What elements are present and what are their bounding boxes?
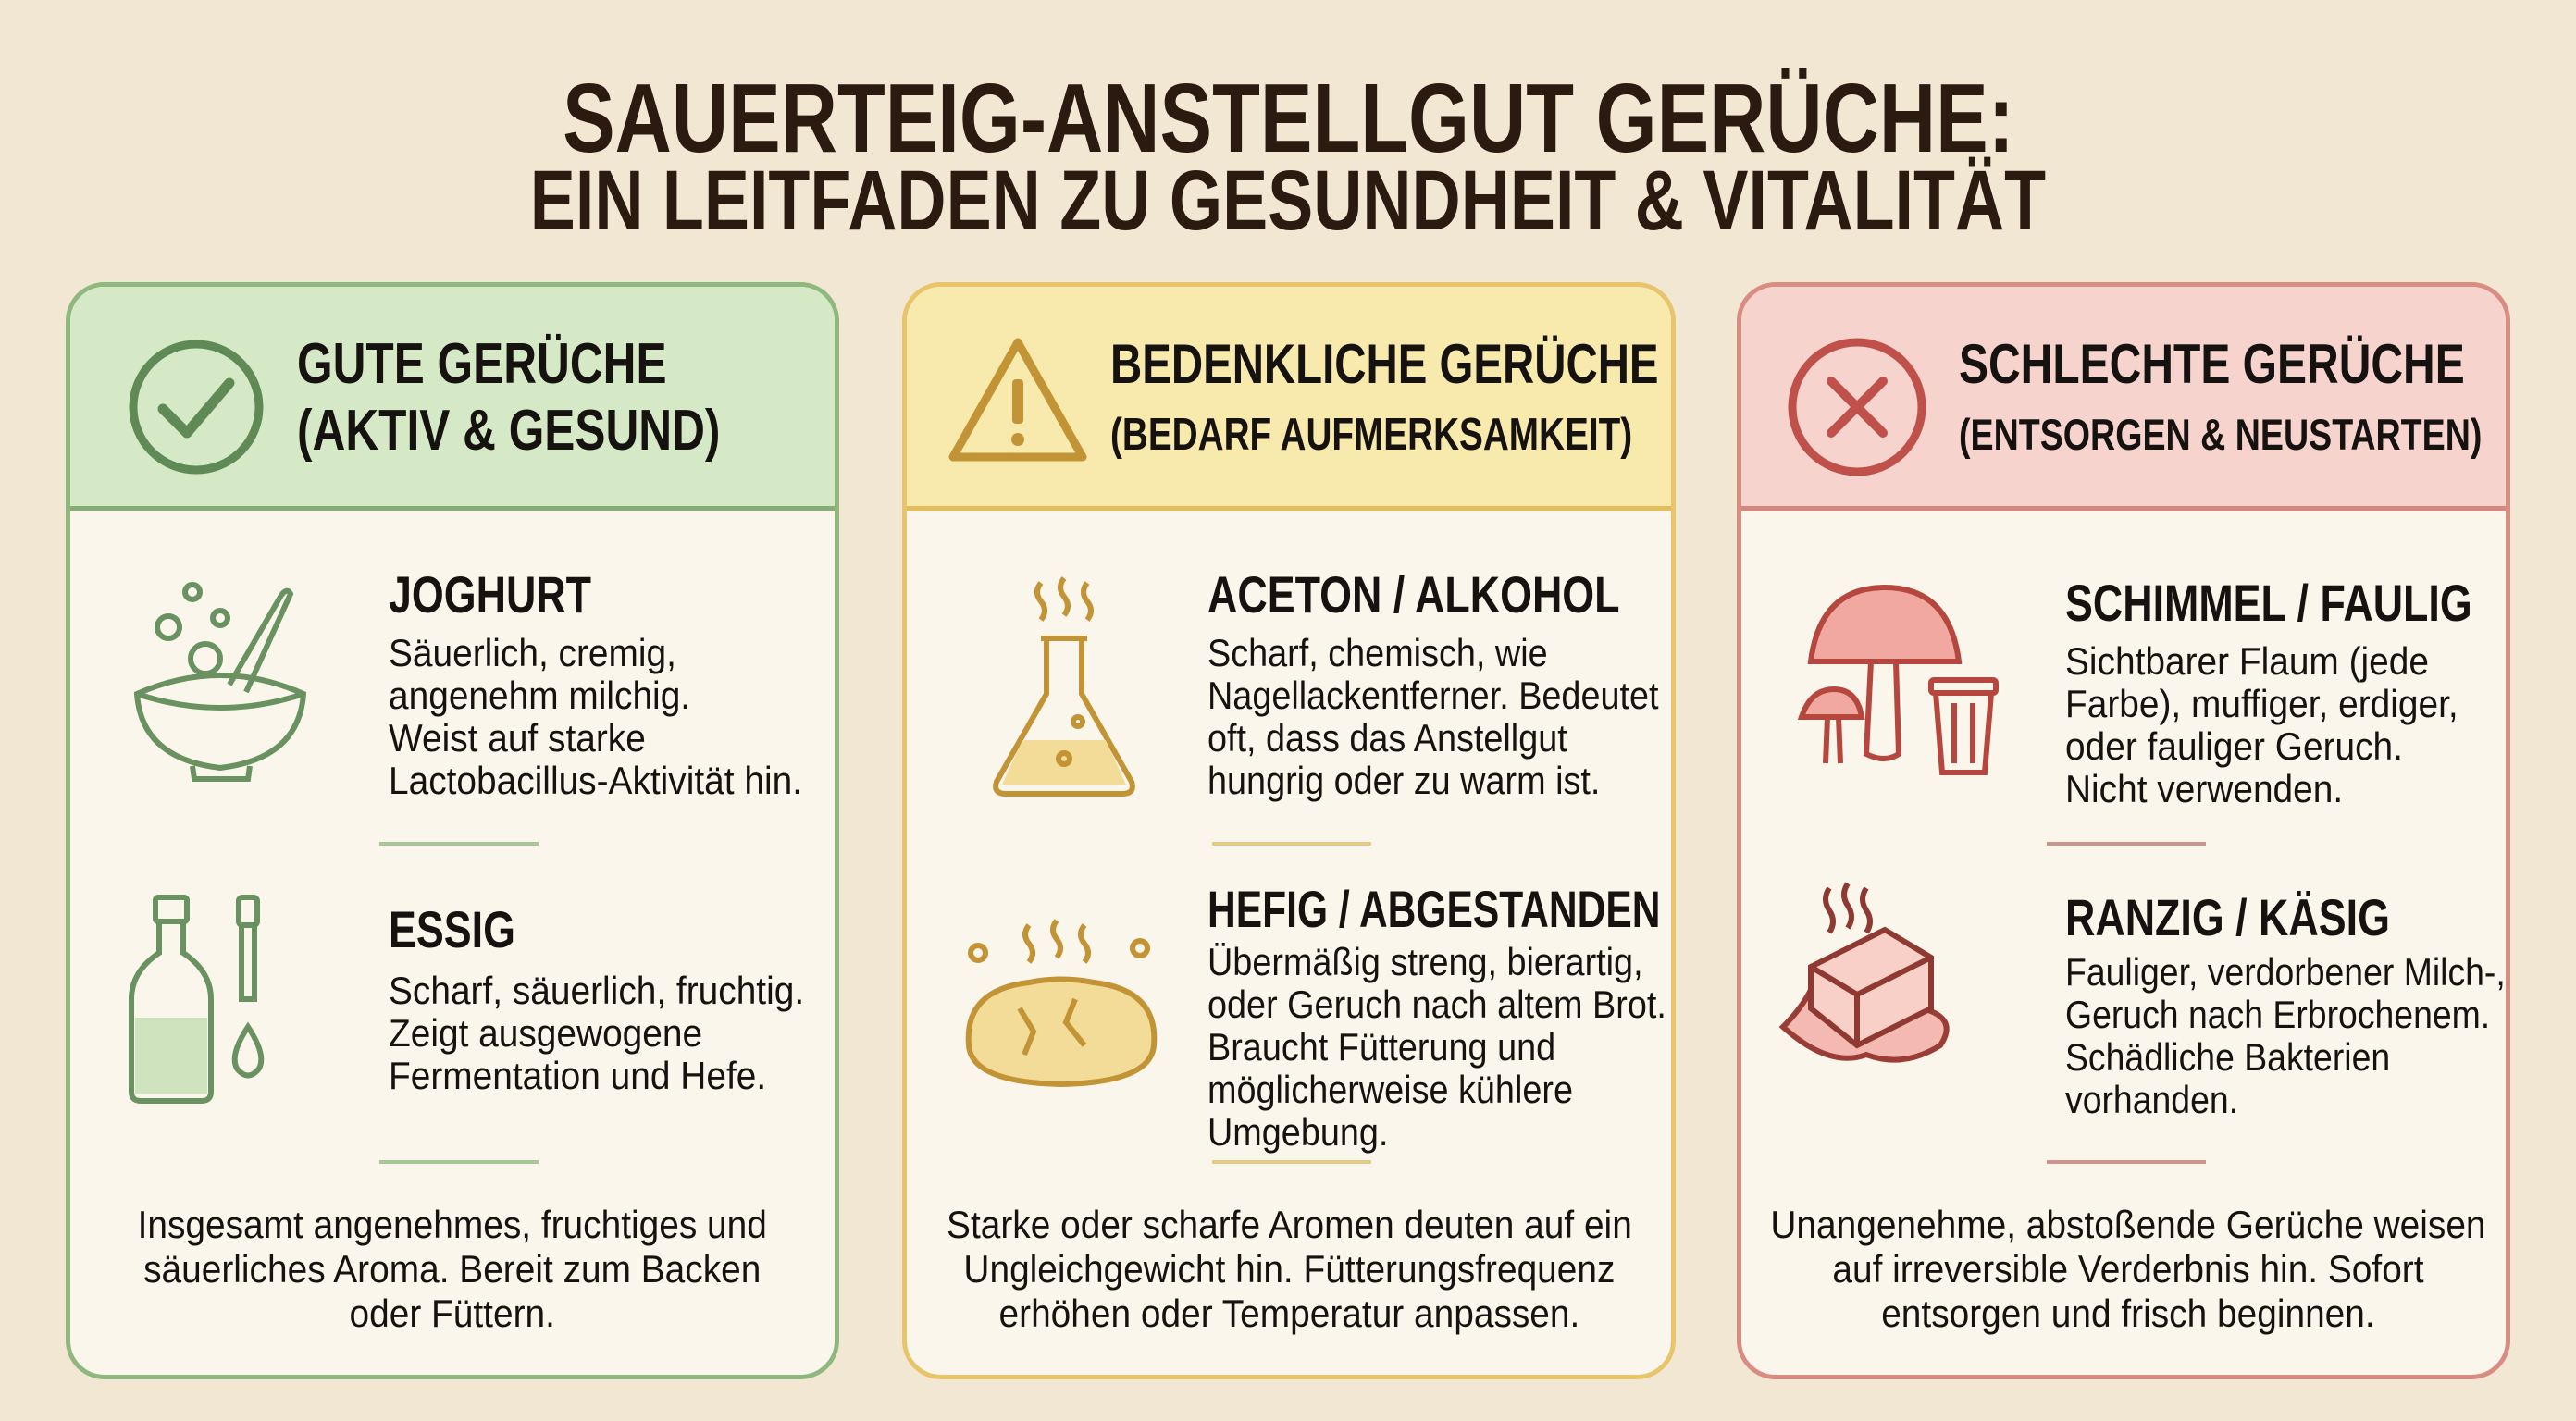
panel: good smells: Säuerlich, cremig, bbox=[389, 631, 676, 674]
icon: vinegar bottle bbox=[129, 895, 265, 1104]
panel: concerning smells: Braucht Fütterung und bbox=[1208, 1025, 1555, 1069]
panel: bad smells: Sichtbarer Flaum (jede bbox=[2065, 639, 2429, 683]
heading bbox=[1110, 333, 1659, 460]
icon: melting butter bbox=[1778, 882, 1950, 1063]
icon: warning bbox=[949, 339, 1086, 461]
panel: concerning smells: oder Geruch nach altem Brot. bbox=[1208, 982, 1666, 1026]
icon: flask bbox=[993, 576, 1135, 797]
panel: concerning smells: oft, dass das Anstellgut bbox=[1208, 716, 1567, 760]
panel: bad smells: vorhanden. bbox=[2065, 1078, 2238, 1121]
heading: (ENTSORGEN & NEUSTARTEN) bbox=[1959, 410, 2482, 459]
heading: GUTE GERÜCHE bbox=[297, 332, 667, 396]
item: hefig: HEFIG / ABGESTANDEN bbox=[1208, 880, 1660, 938]
heading: BEDENKLICHE GERÜCHE bbox=[1110, 333, 1659, 395]
title: SAUERTEIG-ANSTELLGUT GERÜCHE: bbox=[563, 64, 2013, 173]
panel: good smells: angenehm milchig. bbox=[389, 673, 690, 717]
icon: bread bbox=[966, 919, 1157, 1087]
header: good bbox=[70, 287, 835, 511]
item: aceton: ACETON / ALKOHOL bbox=[1208, 565, 1620, 624]
footer text: bad bbox=[1770, 1203, 2486, 1335]
panel: concerning smells: Übermäßig streng, bierartig, bbox=[1208, 940, 1643, 983]
footer text: good: Insgesamt angenehmes, fruchtiges und bbox=[138, 1203, 767, 1246]
panel: bad smells: Nicht verwenden. bbox=[2065, 767, 2343, 810]
heading: (AKTIV & GESUND) bbox=[297, 399, 720, 463]
panel: good smells bbox=[66, 282, 839, 1379]
panel: bad smells bbox=[1737, 282, 2510, 1379]
footer text: good bbox=[138, 1203, 767, 1335]
footer text: concerning: erhöhen oder Temperatur anpassen. bbox=[998, 1291, 1579, 1335]
panel: bad smells: Farbe), muffiger, erdiger, bbox=[2065, 682, 2458, 725]
item: schimmel: SCHIMMEL / FAULIG bbox=[2065, 574, 2472, 632]
panel: concerning smells: möglicherweise kühlere bbox=[1208, 1068, 1573, 1111]
header: bad bbox=[1741, 287, 2506, 511]
panel: concerning smells: Umgebung. bbox=[1208, 1110, 1388, 1154]
item: joghurt: JOGHURT bbox=[389, 565, 591, 624]
icon: yogurt bowl bbox=[133, 582, 307, 782]
panel: good smells: Zeigt ausgewogene bbox=[389, 1011, 702, 1055]
footer text: bad: auf irreversible Verderbnis hin. Sofort bbox=[1832, 1247, 2424, 1291]
icon: cross bbox=[1788, 339, 1926, 476]
heading bbox=[1959, 333, 2482, 459]
panel: concerning smells: Scharf, chemisch, wie bbox=[1208, 631, 1548, 674]
panel: concerning smells bbox=[902, 282, 1676, 1379]
panel: bad smells: Schädliche Bakterien bbox=[2065, 1035, 2390, 1079]
heading: (BEDARF AUFMERKSAMKEIT) bbox=[1110, 410, 1632, 460]
footer text: bad: entsorgen und frisch beginnen. bbox=[1881, 1291, 2375, 1335]
footer text: concerning: Ungleichgewicht hin. Fütterungsfrequenz bbox=[963, 1247, 1615, 1291]
footer text: good: säuerliches Aroma. Bereit zum Backen bbox=[143, 1247, 762, 1291]
panel: good smells: Fermentation und Hefe. bbox=[389, 1054, 766, 1097]
item: ranzig: RANZIG / KÄSIG bbox=[2065, 888, 2390, 946]
icon: check bbox=[130, 340, 263, 474]
header: concerning bbox=[907, 287, 1671, 511]
subtitle: EIN LEITFADEN ZU GESUNDHEIT & VITALITÄT bbox=[530, 154, 2046, 248]
footer text: concerning bbox=[947, 1203, 1631, 1335]
panel: concerning smells: hungrig oder zu warm ist. bbox=[1208, 759, 1600, 802]
heading: SCHLECHTE GERÜCHE bbox=[1959, 333, 2465, 395]
panel: good smells: Scharf, säuerlich, fruchtig. bbox=[389, 969, 804, 1012]
item: essig: ESSIG bbox=[389, 900, 515, 958]
panel: good smells: Lactobacillus-Aktivität hin. bbox=[389, 759, 802, 802]
footer text: concerning: Starke oder scharfe Aromen deuten auf ein bbox=[947, 1203, 1631, 1246]
panel: bad smells: Geruch nach Erbrochenem. bbox=[2065, 993, 2490, 1036]
heading bbox=[297, 332, 720, 463]
panel: bad smells: Fauliger, verdorbener Milch-, bbox=[2065, 950, 2506, 994]
icon: mushroom and bin bbox=[1797, 585, 1999, 775]
panel: bad smells: oder fauliger Geruch. bbox=[2065, 724, 2403, 768]
footer text: bad: Unangenehme, abstoßende Gerüche weisen bbox=[1770, 1203, 2486, 1246]
footer text: good: oder Füttern. bbox=[350, 1291, 555, 1335]
panel: concerning smells: Nagellackentferner. Bedeutet bbox=[1208, 673, 1659, 717]
panel: good smells: Weist auf starke bbox=[389, 716, 646, 760]
